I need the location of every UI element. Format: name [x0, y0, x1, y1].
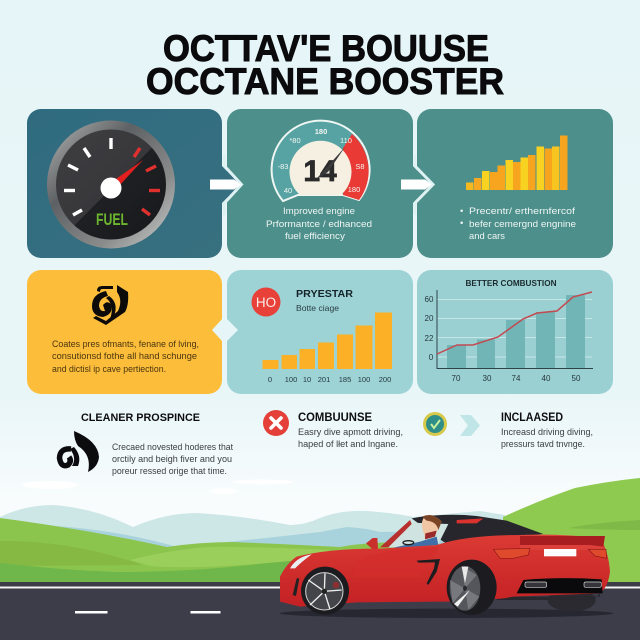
- title: OCTTAV'E BOUUSE: [163, 28, 489, 69]
- x axis labels: 74: [512, 374, 521, 383]
- block: inclaased: [423, 412, 593, 450]
- block: cleaner prospince: [60, 412, 233, 477]
- icon: speedometer: -83: [278, 162, 288, 171]
- gauge needle: [113, 160, 143, 187]
- x axis labels: 30: [483, 374, 492, 383]
- rear underside: [497, 593, 600, 600]
- bars: [447, 295, 585, 368]
- text: engine performance: Prformantce / edhanced: [266, 219, 372, 230]
- rear wheel: [447, 560, 497, 615]
- y axis labels: [425, 295, 434, 362]
- x axis labels: 50: [572, 374, 581, 383]
- panel: improved engine performance: [227, 109, 413, 258]
- text: bullet list: befer cemergnd engnine: [469, 219, 576, 230]
- text: engine performance: Improved engine: [283, 206, 355, 217]
- car: red convertible: [280, 515, 613, 618]
- bar chart axis labels: [268, 375, 391, 384]
- windscreen and driver: [380, 515, 448, 548]
- block: combuunse: [263, 410, 403, 450]
- text: bullet list: •: [460, 218, 463, 229]
- icon: red x: [263, 410, 289, 436]
- bar chart axis labels: 201: [318, 375, 330, 384]
- tail light left: [493, 548, 530, 558]
- icon: speedometer: 14: [303, 155, 337, 188]
- arrow: engine to bars: [401, 155, 433, 215]
- rear bumper: [517, 578, 603, 593]
- text: yellow panel body: Coates pres ofmants, fenane of lving,: [52, 339, 199, 350]
- text: bullet list: [460, 206, 576, 242]
- road: [0, 582, 640, 640]
- text: haped of lłet and lngane.: [298, 439, 398, 450]
- chart title: BETTER COMBUSTION: [466, 278, 556, 288]
- bar chart axis labels: 10: [303, 375, 311, 384]
- connector diamond: [212, 319, 238, 341]
- x axis labels: 70: [452, 374, 461, 383]
- x axis labels: [452, 374, 581, 383]
- distant hills: [0, 505, 505, 582]
- text: bullet list: and cars: [469, 231, 505, 242]
- body highlight: [353, 547, 440, 577]
- rear far wheel: [548, 588, 596, 612]
- lane dashes: [75, 611, 220, 614]
- headlight: [290, 554, 312, 568]
- panel: fuel gauge: [27, 109, 240, 258]
- arrow: gauge to engine: [210, 155, 242, 215]
- icon: pale chevron: [460, 415, 480, 436]
- icon: HO badge: HO: [256, 295, 276, 310]
- blue water band: [43, 525, 510, 582]
- icon: fuel gauge dial: [47, 120, 175, 248]
- text: yellow panel body: [52, 339, 199, 375]
- license plate: [544, 549, 576, 556]
- text: poreur ressed orige that time.: [112, 466, 227, 477]
- bar chart: yellow bars: [466, 136, 568, 190]
- text: bullet list: Precentr/ erthernfercof: [469, 206, 575, 217]
- icon: black leaf swirl: [60, 431, 99, 472]
- text: yellow panel body: consutionsd fothe all hand schunge: [52, 351, 197, 362]
- side vent: [417, 559, 440, 585]
- line chart: [437, 292, 592, 354]
- front wheel: [301, 567, 349, 615]
- y axis labels: 20: [425, 314, 434, 323]
- tail light right: [588, 549, 607, 558]
- text: yellow panel body: and dictisl ip cave pertiection.: [52, 364, 166, 375]
- spoiler: [520, 536, 605, 547]
- bar chart axis labels: 100: [358, 375, 370, 384]
- y axis labels: 60: [425, 295, 434, 304]
- landscape: [0, 478, 640, 582]
- clouds: [22, 480, 293, 494]
- subheading: Botte ciage: [296, 303, 339, 313]
- text: [298, 427, 403, 450]
- text: Crecaed novested hoderes that: [112, 442, 233, 453]
- exhausts: [525, 582, 547, 587]
- title: OCCTANE BOOSTER: [146, 61, 504, 102]
- icon: HO badge: [252, 288, 280, 316]
- car shadow: [280, 609, 613, 618]
- speedometer needle: [315, 147, 345, 180]
- axes: [437, 290, 593, 368]
- text: Easry dive apmott driving,: [298, 427, 403, 438]
- text: pressurs tavd tnvnge.: [501, 439, 585, 450]
- text: bullet list: •: [460, 206, 463, 217]
- icon: black emblem: [92, 285, 128, 325]
- icon: speedometer: *80: [289, 136, 301, 145]
- body: [280, 535, 610, 607]
- bar chart axis labels: 100: [285, 375, 297, 384]
- text: orctily and beigh fiver and you: [112, 454, 232, 465]
- heading: CLEANER PROSPINCE: [81, 412, 200, 424]
- icon: green check badge: [423, 412, 447, 436]
- icon: speedometer: 180: [315, 127, 327, 136]
- green hills: [0, 518, 400, 582]
- icon: speedometer: S8: [355, 162, 365, 171]
- text: engine performance: fuel efficiency: [285, 231, 345, 242]
- y axis labels: 22: [425, 334, 434, 343]
- panel: performance bars: [417, 109, 613, 258]
- bar chart axis labels: 0: [268, 375, 272, 384]
- text: [112, 442, 233, 477]
- panel: pryestar chart: [212, 270, 413, 394]
- bar chart axis labels: 200: [379, 375, 391, 384]
- text: [501, 427, 593, 450]
- panel: better combustion chart: [417, 270, 613, 394]
- text: engine performance: [266, 206, 372, 242]
- heading: pryestar: PRYESTAR: [296, 288, 353, 300]
- icon: speedometer: [272, 121, 370, 201]
- gridlines: [437, 300, 592, 357]
- text: Increasd driving diving,: [501, 427, 593, 438]
- mirror: [366, 538, 378, 553]
- heading: COMBUUNSE: [298, 412, 372, 424]
- title: [146, 28, 504, 102]
- icon: speedometer: 180: [348, 185, 360, 194]
- front intake: [293, 578, 299, 596]
- roof and rear deck: [412, 515, 543, 543]
- bar chart: orange bars: [262, 312, 392, 369]
- icon: fuel gauge dial: FUEL: [96, 210, 128, 229]
- panel: yellow benefits: [27, 270, 222, 394]
- icon: speedometer: 110: [340, 136, 352, 145]
- bar chart axis labels: 185: [339, 375, 351, 384]
- heading: INCLAASED: [501, 412, 563, 424]
- icon: speedometer: 40: [284, 186, 292, 195]
- x axis labels: 40: [542, 374, 551, 383]
- y axis labels: 0: [429, 353, 434, 362]
